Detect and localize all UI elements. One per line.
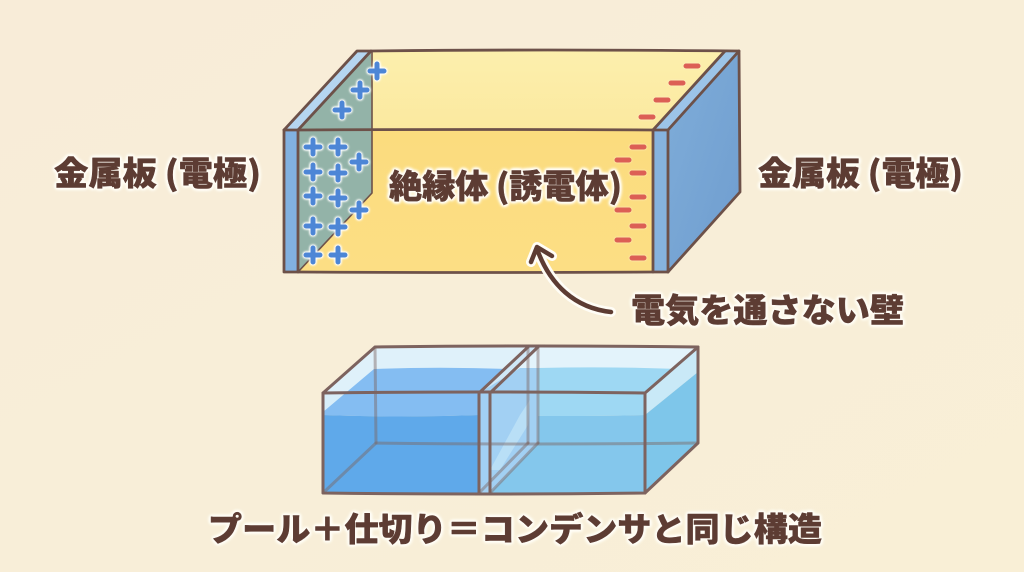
label: wall that blocks electricity: 電気を通さない壁 xyxy=(631,284,904,332)
outlines of pool xyxy=(323,346,698,494)
panel: right side glass xyxy=(645,347,698,415)
label: right metal plate: 金属板 (電極) xyxy=(758,147,963,195)
outlines of capacitor xyxy=(284,50,740,272)
panel: right electrode front edge xyxy=(653,130,668,272)
panel: left tank upper front xyxy=(323,393,479,415)
panel: back face of insulator xyxy=(298,51,725,130)
panel: divider water xyxy=(479,368,538,493)
panel: left water body xyxy=(323,415,479,493)
panel: left electrode top edge xyxy=(284,51,371,130)
panel: right electrode side face xyxy=(668,51,740,272)
capacitor diagram xyxy=(284,50,740,272)
label: insulator: 絶縁体 (誘電体) xyxy=(389,160,622,208)
plus charges xyxy=(306,64,384,262)
panel: right water surface xyxy=(490,367,698,416)
panel: right electrode top edge xyxy=(653,51,739,130)
arrow: to insulator xyxy=(531,247,611,312)
pool diagram xyxy=(323,346,698,494)
panel: transparent left electrode plate xyxy=(298,51,372,272)
panel: divider upper xyxy=(479,347,538,393)
panel: divider diagonal highlight xyxy=(490,400,530,470)
panel: left tank glass xyxy=(323,347,528,393)
panel: right tank glass xyxy=(490,347,698,393)
label: left metal plate: 金属板 (電極) xyxy=(54,147,261,195)
panel: front face of insulator xyxy=(298,130,653,272)
panel: left electrode front edge xyxy=(284,130,298,272)
panel: right water body xyxy=(490,415,645,493)
panel: left water surface xyxy=(323,368,532,416)
caption: プール＋仕切り＝コンデンサと同じ構造 xyxy=(208,503,822,551)
minus charges xyxy=(617,66,698,258)
panel: right side water xyxy=(645,372,698,493)
